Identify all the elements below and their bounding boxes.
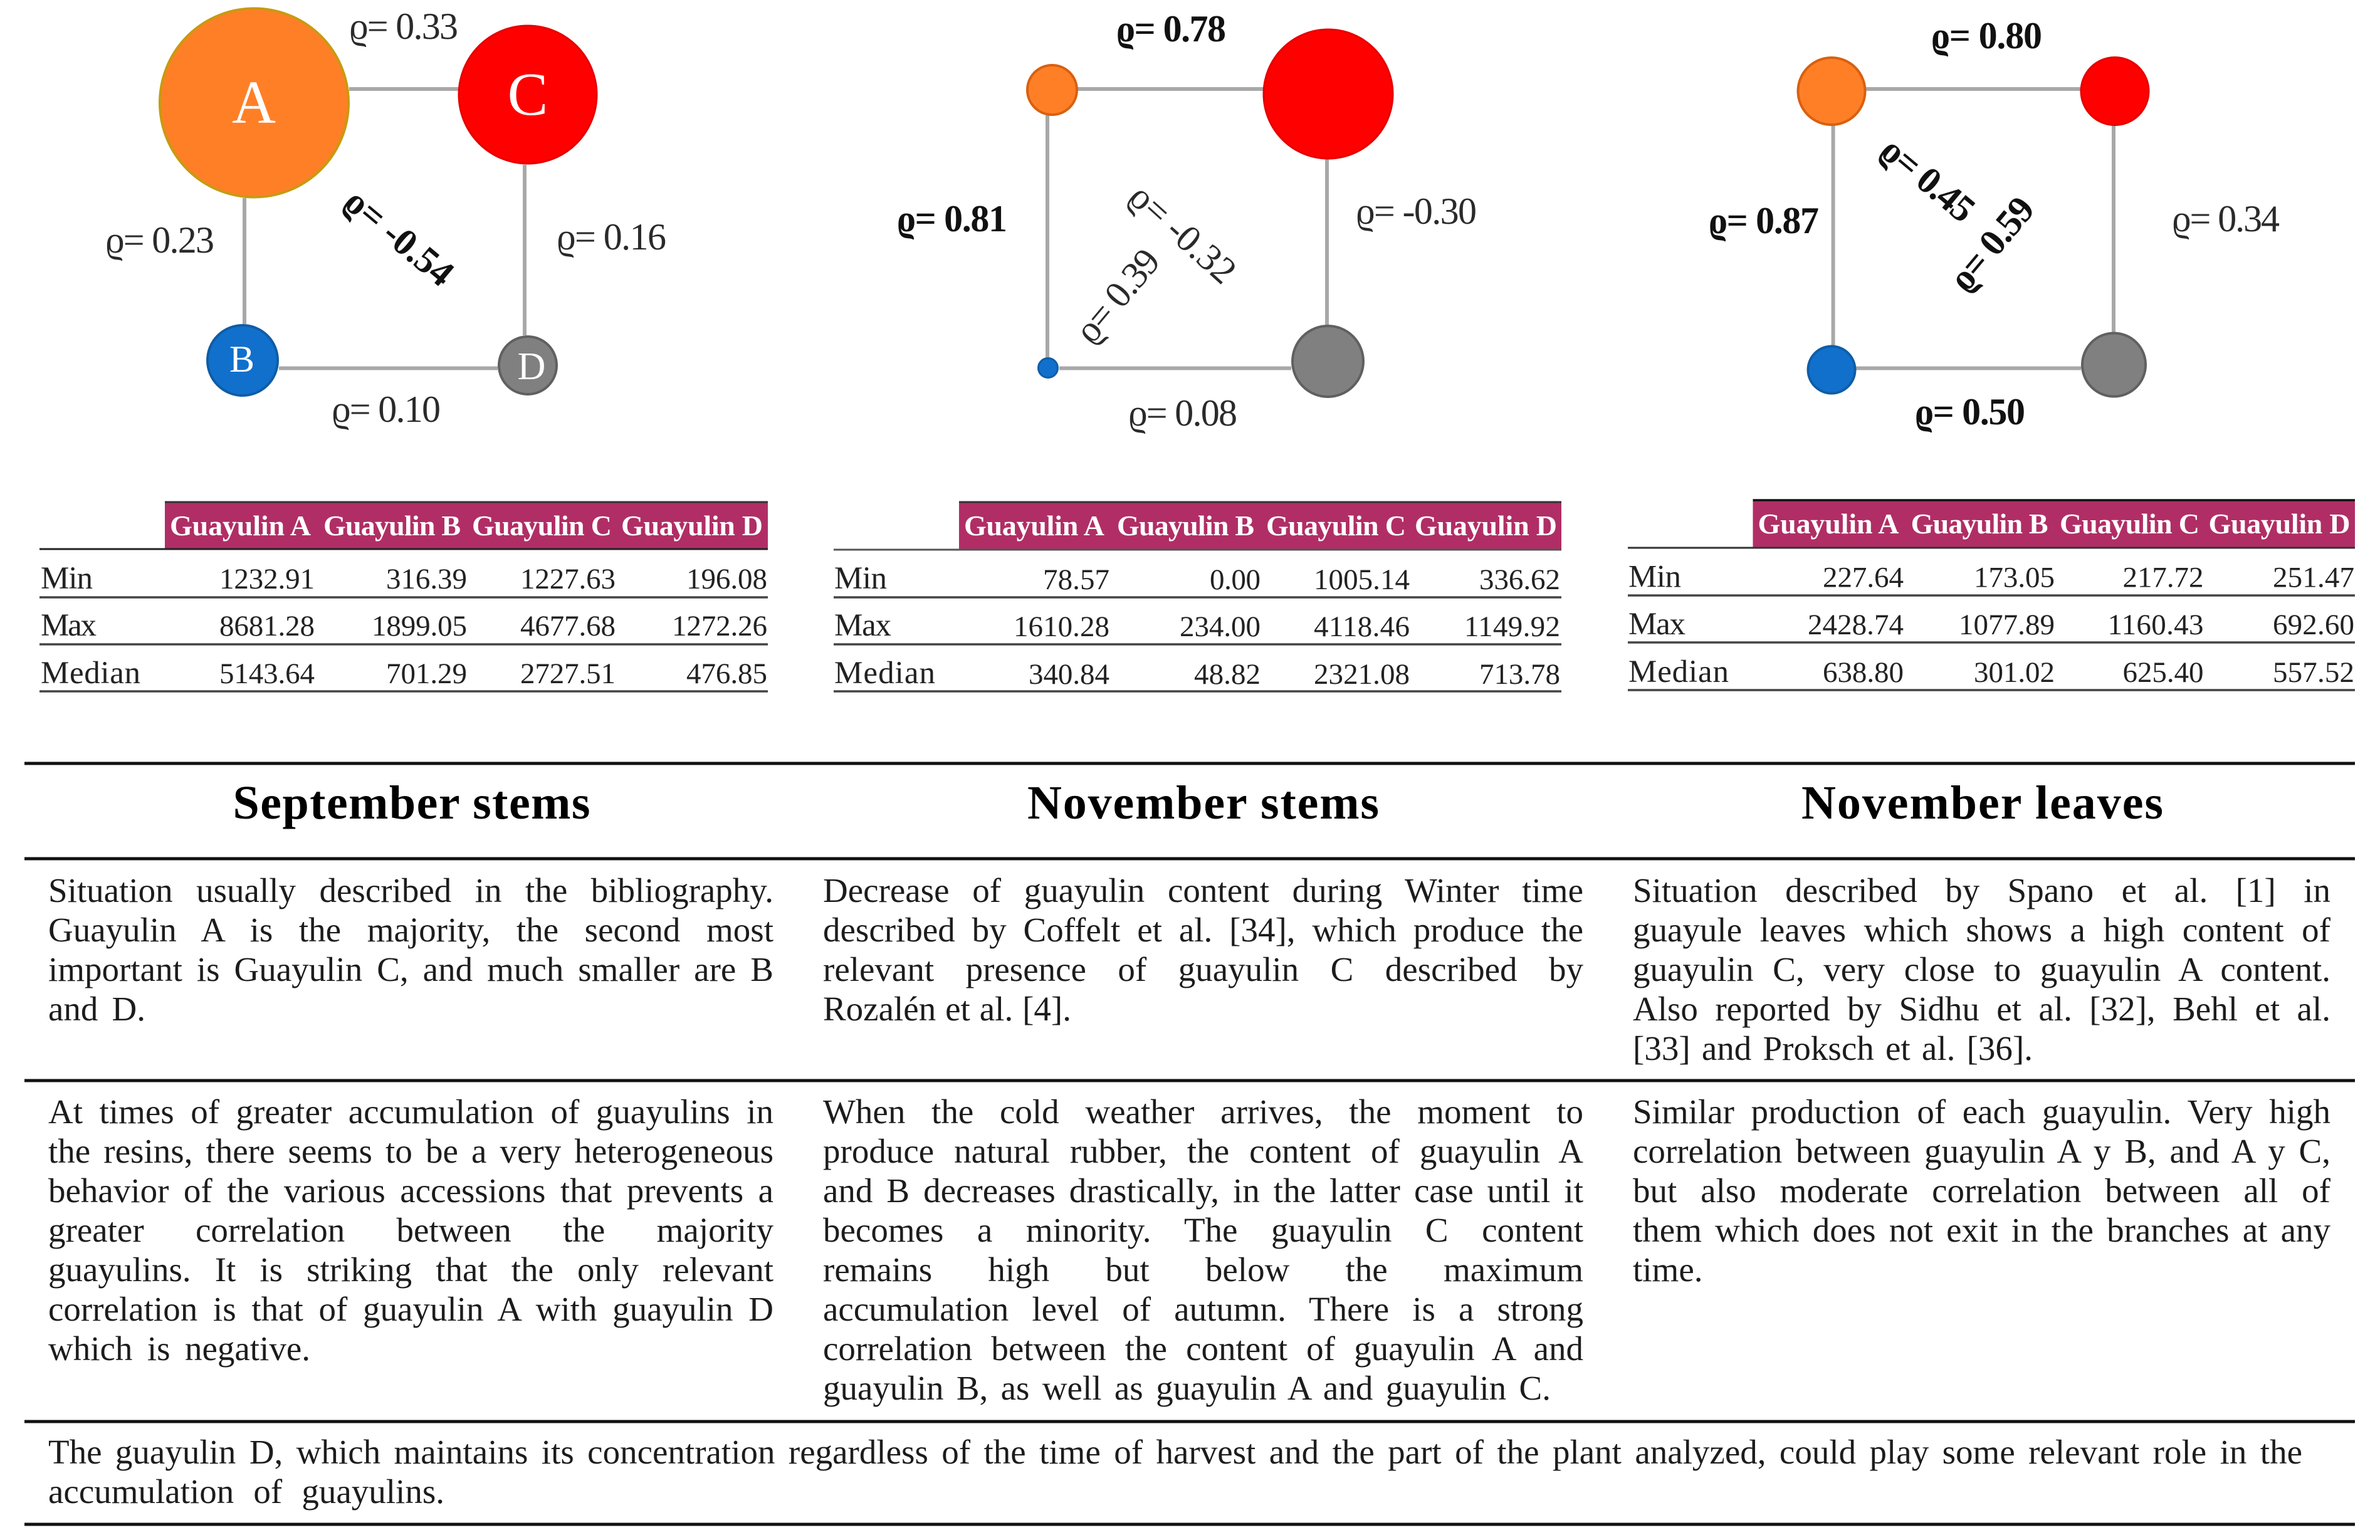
table: November leaves: 173.05 bbox=[1974, 562, 2055, 594]
text: November leaves, correlation: correlation between guayulin A y B, and A y C, bbox=[1633, 1132, 2330, 1170]
heading: November stems: November stems bbox=[1027, 777, 1379, 829]
table: September stems: 316.39 bbox=[386, 563, 467, 595]
text: November stems, correlation: produce natural rubber, the content of guayulin A bbox=[823, 1132, 1583, 1170]
table: September stems: 1232.91 bbox=[219, 563, 315, 595]
text: November leaves, correlation: but also moderate correlation between all of bbox=[1633, 1171, 2330, 1210]
table: November leaves: 692.60 bbox=[2273, 609, 2354, 641]
node A: A bbox=[232, 69, 276, 136]
label A-D: ϱ= 0.45 bbox=[1873, 128, 1983, 231]
text: November leaves, correlation: Similar production of each guayulin. Very high bbox=[1633, 1092, 2330, 1131]
text: November stems, situation: described by Coffelt et al. [34], which produce the bbox=[823, 911, 1583, 949]
text: September stems, correlation: guayulins. It is striking that the only relevant bbox=[48, 1250, 773, 1289]
text: September stems, correlation bbox=[48, 1092, 773, 1368]
label C-D: ϱ= 0.16 bbox=[557, 216, 666, 258]
heading: September stems: September stems bbox=[233, 777, 590, 829]
node D bbox=[2082, 333, 2146, 396]
table: November stems: 48.82 bbox=[1194, 658, 1261, 691]
node D: D bbox=[518, 345, 545, 388]
label A-B: ϱ= 0.87 bbox=[1709, 200, 1819, 241]
correlation network: November leaves bbox=[1709, 15, 2280, 432]
table: September stems: Guayulin B bbox=[323, 510, 461, 542]
table: November leaves: 557.52 bbox=[2273, 656, 2354, 689]
node A bbox=[160, 9, 349, 197]
node A bbox=[1027, 65, 1077, 115]
table: November stems: Max bbox=[834, 608, 891, 643]
table: November stems: Guayulin B bbox=[1117, 510, 1254, 542]
node B bbox=[1038, 359, 1058, 377]
table: September stems: 1899.05 bbox=[372, 610, 467, 642]
text: November leaves, situation: Situation described by Spano et al. [1] in bbox=[1633, 871, 2330, 909]
text: November stems, correlation: accumulation level of autumn. There is a strong bbox=[823, 1290, 1583, 1328]
table: September stems: 476.85 bbox=[686, 657, 767, 690]
text: September stems, correlation: behavior of the various accessions that prevents a bbox=[48, 1171, 773, 1210]
text: November leaves, correlation: time. bbox=[1633, 1250, 1703, 1289]
label A-C: ϱ= 0.80 bbox=[1931, 15, 2042, 56]
node B bbox=[207, 325, 278, 395]
label B-C: ϱ= 0.59 bbox=[1941, 189, 2043, 299]
text: September stems, correlation: correlation is that of guayulin A with guayulin D bbox=[48, 1290, 773, 1328]
table: November leaves: Guayulin D bbox=[2209, 508, 2351, 540]
table: November leaves: Guayulin A bbox=[1758, 508, 1899, 540]
text: November leaves, situation: [33] and Proksch et al. [36]. bbox=[1633, 1029, 2033, 1067]
table: November stems: 2321.08 bbox=[1314, 658, 1410, 691]
node B bbox=[1808, 346, 1855, 394]
table: November leaves: Min bbox=[1628, 559, 1681, 594]
text: November leaves, correlation: them which does not exit in the branches at any bbox=[1633, 1211, 2330, 1249]
table: September stems: 1272.26 bbox=[672, 610, 767, 642]
table: September stems: Guayulin C bbox=[472, 510, 612, 542]
table: September stems: Max bbox=[41, 608, 97, 643]
table: November stems: 234.00 bbox=[1180, 610, 1261, 643]
text: November stems, correlation: correlation between the content of guayulin A and bbox=[823, 1329, 1583, 1368]
table: November leaves: 251.47 bbox=[2273, 562, 2354, 594]
table: September stems: 8681.28 bbox=[219, 610, 315, 642]
table: September stems: 2727.51 bbox=[520, 657, 616, 690]
table: November leaves: 227.64 bbox=[1823, 562, 1904, 594]
text: November leaves, situation: guayulin C, very close to guayulin A content. bbox=[1633, 950, 2330, 988]
node C: C bbox=[508, 61, 548, 128]
text: September stems, correlation: At times of greater accumulation of guayulins in bbox=[48, 1092, 773, 1131]
label C-D: ϱ= -0.30 bbox=[1356, 191, 1477, 232]
text: overall conclusion: accumulation of guayulins. bbox=[48, 1472, 444, 1511]
label B-D: ϱ= 0.10 bbox=[332, 389, 441, 430]
table: September stems: Min bbox=[41, 561, 93, 596]
node C bbox=[459, 26, 597, 164]
table: September stems: 701.29 bbox=[386, 657, 467, 690]
table: September stems bbox=[39, 502, 768, 691]
text: November stems, situation bbox=[823, 871, 1583, 1028]
table: November leaves bbox=[1628, 500, 2355, 690]
text: November stems, correlation bbox=[823, 1092, 1583, 1407]
table: November leaves: 1077.89 bbox=[1959, 609, 2055, 641]
correlation network: November stems bbox=[897, 8, 1477, 434]
label B-D: ϱ= 0.08 bbox=[1128, 392, 1237, 434]
table: September stems: Median bbox=[41, 656, 140, 691]
text: September stems, situation bbox=[48, 871, 773, 1028]
table: November stems: Guayulin D bbox=[1415, 510, 1557, 542]
table: November stems: 336.62 bbox=[1479, 563, 1560, 596]
table: November stems: Min bbox=[834, 561, 887, 596]
text: November stems, correlation: and B decreases drastically, in the latter case until it bbox=[823, 1171, 1583, 1210]
text: September stems, correlation: greater correlation between the majority bbox=[48, 1211, 773, 1249]
table: September stems: Guayulin A bbox=[170, 510, 311, 542]
table: November stems: 713.78 bbox=[1479, 658, 1560, 691]
text: November stems, correlation: guayulin B, as well as guayulin A and guayulin C. bbox=[823, 1369, 1551, 1407]
table: November stems: 4118.46 bbox=[1314, 610, 1410, 643]
label C-D: ϱ= 0.34 bbox=[2172, 198, 2280, 239]
table: September stems: 1227.63 bbox=[520, 563, 616, 595]
text: November leaves, situation: Also reported by Sidhu et al. [32], Behl et al. bbox=[1633, 990, 2330, 1028]
node A bbox=[1798, 58, 1865, 125]
table: November leaves: Guayulin B bbox=[1911, 508, 2048, 540]
label B-D: ϱ= 0.50 bbox=[1915, 391, 2025, 432]
text: September stems, situation: Guayulin A is the majority, the second most bbox=[48, 911, 773, 949]
table: November stems bbox=[834, 502, 1561, 691]
text: September stems, correlation: which is negative. bbox=[48, 1329, 310, 1368]
node C bbox=[1264, 29, 1393, 159]
label A-C: ϱ= 0.78 bbox=[1116, 8, 1226, 50]
text: November stems, correlation: remains high but below the maximum bbox=[823, 1250, 1583, 1289]
table: November leaves: Max bbox=[1628, 607, 1685, 642]
table: November leaves: 301.02 bbox=[1974, 656, 2055, 689]
text: November stems, correlation: becomes a minority. The guayulin C content bbox=[823, 1211, 1583, 1249]
table: November stems: 1610.28 bbox=[1014, 610, 1109, 643]
heading: November leaves: November leaves bbox=[1801, 777, 2163, 829]
table: November stems: 340.84 bbox=[1029, 658, 1109, 691]
table: November leaves: 638.80 bbox=[1823, 656, 1904, 689]
label B-C: ϱ= 0.39 bbox=[1066, 241, 1168, 351]
table: November stems: Guayulin A bbox=[964, 510, 1104, 542]
text: November leaves, situation: guayule leaves which shows a high content of bbox=[1633, 911, 2330, 949]
text: November stems, correlation: When the cold weather arrives, the moment to bbox=[823, 1092, 1583, 1131]
table: November leaves: 1160.43 bbox=[2107, 609, 2204, 641]
text: November stems, situation: Rozalén et al. [4]. bbox=[823, 990, 1071, 1028]
table: November leaves: Guayulin C bbox=[2060, 508, 2199, 540]
text: overall conclusion: The guayulin D, which maintains its concentration regardless of the time of harvest and the part of the plant analyzed, could play some relevant role in the bbox=[48, 1433, 2302, 1471]
node D bbox=[1292, 326, 1363, 397]
label A-D: ϱ= -0.54 bbox=[337, 180, 462, 295]
node B: B bbox=[229, 338, 254, 380]
label A-B: ϱ= 0.81 bbox=[897, 198, 1007, 239]
table: November leaves: 2428.74 bbox=[1808, 609, 1904, 641]
text: September stems, correlation: the resins, there seems to be a very heterogeneous bbox=[48, 1132, 773, 1170]
text: November leaves, situation bbox=[1633, 871, 2330, 1067]
label A-B: ϱ= 0.23 bbox=[105, 219, 214, 261]
table: September stems: 196.08 bbox=[686, 563, 767, 595]
table: November leaves: 217.72 bbox=[2122, 562, 2204, 594]
table: November leaves: Median bbox=[1628, 654, 1729, 689]
text: overall conclusion bbox=[48, 1433, 2302, 1511]
label A-D: ϱ= -0.32 bbox=[1121, 175, 1245, 292]
table: November stems: 0.00 bbox=[1210, 563, 1261, 596]
correlation network: September stems bbox=[105, 6, 666, 430]
node D bbox=[499, 337, 557, 394]
table: November stems: Guayulin C bbox=[1266, 510, 1406, 542]
text: September stems, situation: and D. bbox=[48, 990, 145, 1028]
table: November stems: Median bbox=[834, 656, 935, 691]
table: November stems: 78.57 bbox=[1043, 563, 1109, 596]
text: November stems, situation: Decrease of guayulin content during Winter time bbox=[823, 871, 1583, 909]
table: September stems: 5143.64 bbox=[219, 657, 315, 690]
table: November stems: 1149.92 bbox=[1464, 610, 1560, 643]
text: November stems, situation: relevant presence of guayulin C described by bbox=[823, 950, 1583, 988]
table: September stems: Guayulin D bbox=[621, 510, 763, 542]
text: November leaves, correlation bbox=[1633, 1092, 2330, 1289]
node C bbox=[2081, 58, 2149, 125]
table: November leaves: 625.40 bbox=[2122, 656, 2204, 689]
text: September stems, situation: important is Guayulin C, and much smaller are B bbox=[48, 950, 773, 988]
text: September stems, situation: Situation usually described in the bibliography. bbox=[48, 871, 773, 909]
table: November stems: 1005.14 bbox=[1314, 563, 1410, 596]
table: September stems: 4677.68 bbox=[520, 610, 616, 642]
label A-C: ϱ= 0.33 bbox=[349, 6, 458, 47]
